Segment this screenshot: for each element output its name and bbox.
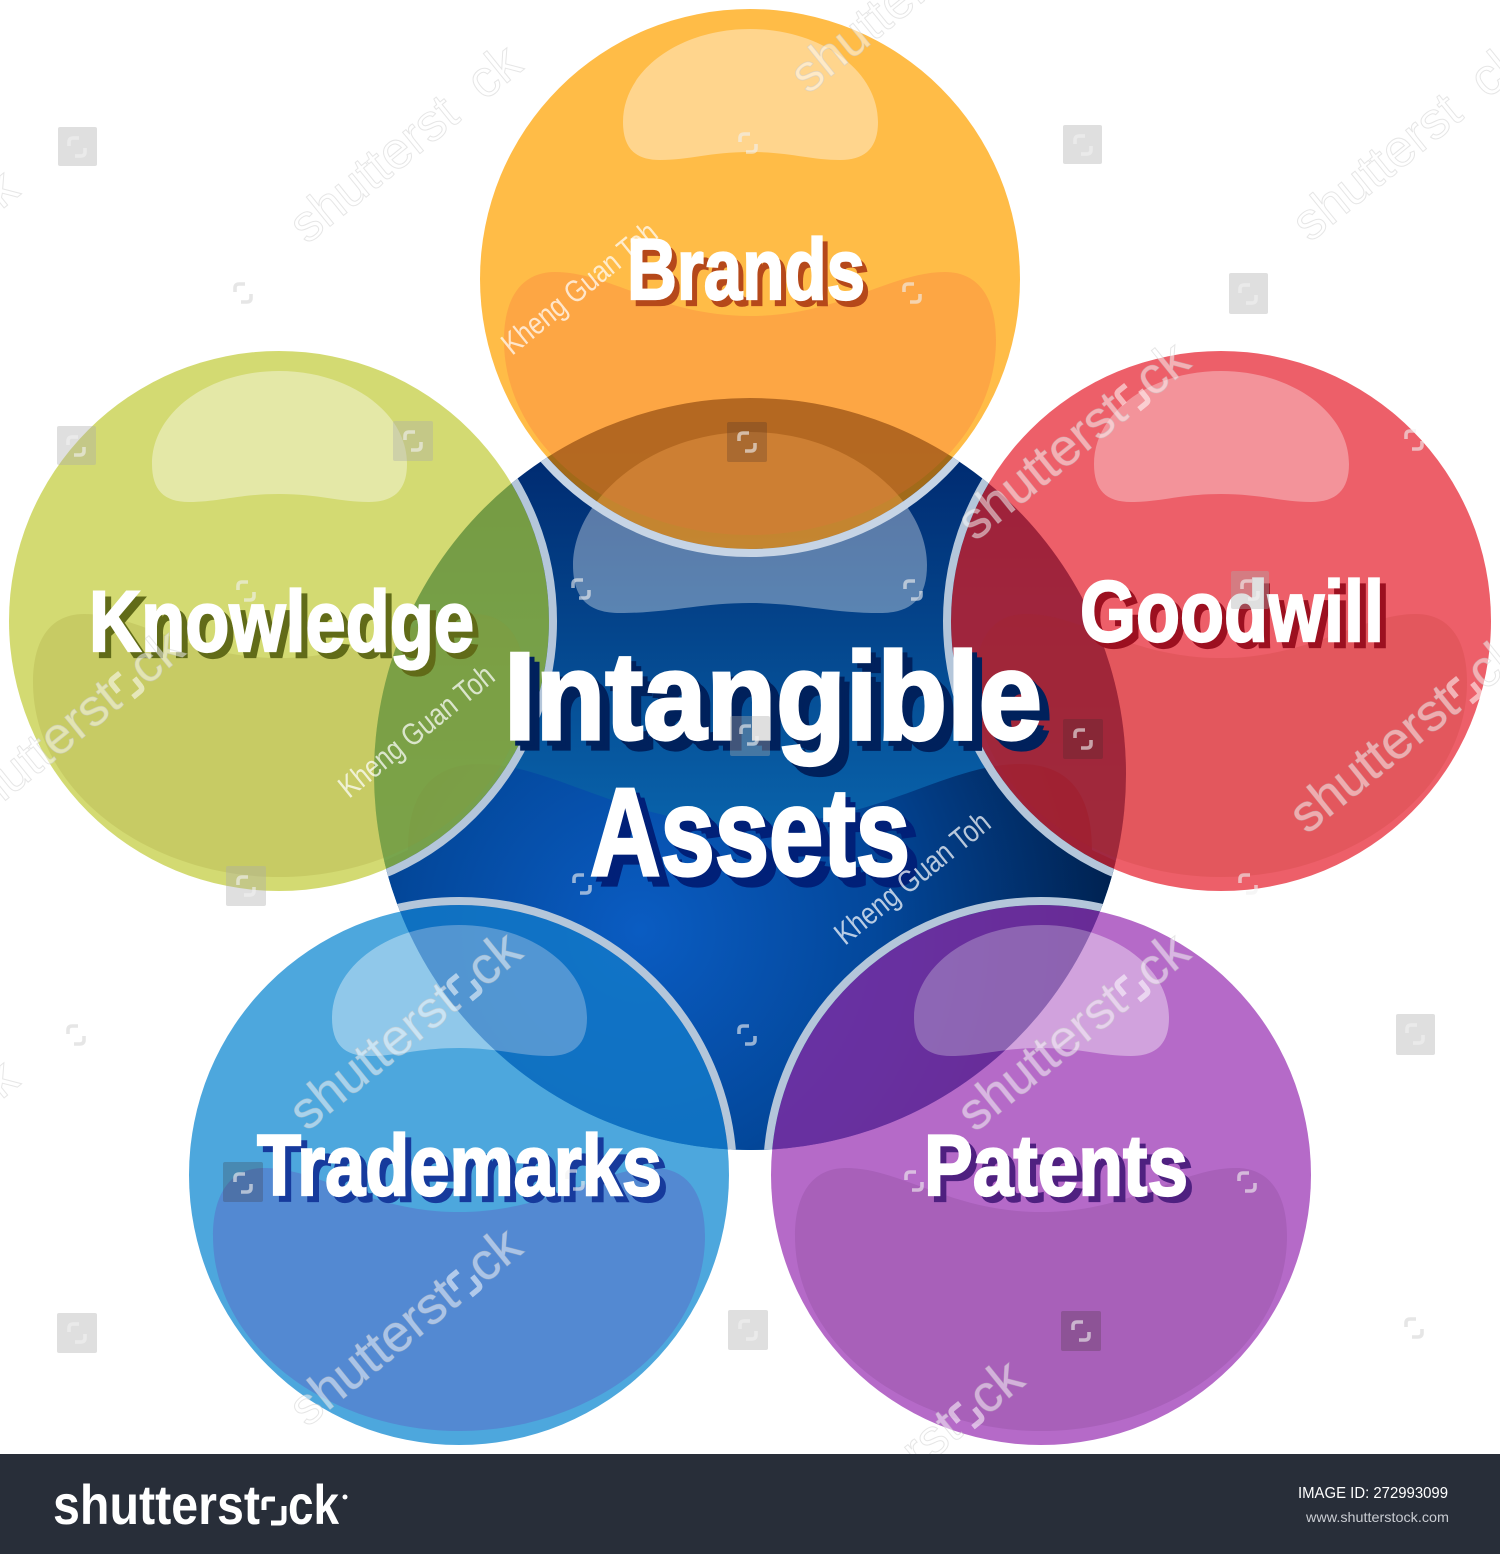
label: Brands: Brands — [632, 228, 870, 324]
label: Patents: Patents — [924, 1118, 1188, 1214]
label: Intangible Assets: Intangible — [509, 633, 1047, 771]
watermark: shutterstock wordmarks: shutterst — [278, 83, 470, 254]
watermark: author name: Kheng Guan Toh — [494, 215, 664, 361]
overlap shading between petals and center — [374, 398, 1126, 1150]
watermark: shutterstock wordmarks: shutterst — [1278, 673, 1470, 844]
watermark: shutterstock wordmarks: ck — [1123, 329, 1201, 408]
petal: Knowledge — [9, 351, 549, 891]
label: Patents: Patents — [930, 1124, 1194, 1220]
label: Intangible Assets: Assets — [590, 764, 910, 902]
watermark: author name — [331, 215, 997, 951]
website: www.shutterstock.com — [1305, 1509, 1449, 1525]
watermark: author name: Kheng Guan Toh — [827, 805, 997, 951]
label: Goodwill: Goodwill — [1080, 564, 1384, 660]
footer logo: shutterst — [53, 1473, 260, 1536]
label: Knowledge: Knowledge — [95, 580, 480, 676]
watermark: shutterstock wordmarks: shutterst — [946, 380, 1138, 551]
petal: Goodwill — [951, 351, 1491, 891]
label: Intangible Assets: Intangible — [504, 628, 1042, 766]
label: Trademarks: Trademarks — [263, 1124, 668, 1220]
watermark icons — [68, 134, 1423, 1342]
label: Intangible Assets: Intangible — [514, 638, 1052, 776]
watermark: shutterstock wordmarks: ck — [455, 1215, 533, 1294]
watermark: shutterstock wordmarks: ck — [117, 617, 195, 696]
footer bar — [0, 1454, 1500, 1554]
center circle: Intangible Assets — [374, 398, 1126, 1150]
label: Intangible Assets: Assets — [600, 774, 920, 912]
label: Intangible Assets — [504, 628, 1052, 912]
watermark: shutterstock wordmarks: ck — [455, 32, 533, 111]
petal: Trademarks — [189, 905, 729, 1445]
petal: Brands — [480, 9, 1020, 549]
watermark: shutterstock wordmarks: ck — [957, 1347, 1035, 1426]
watermark: shutterstock wordmarks: shutterst — [1281, 81, 1473, 252]
watermark: shutterstock wordmarks: shutterst — [278, 970, 470, 1141]
label: Intangible Assets: Assets — [595, 769, 915, 907]
image id: IMAGE ID: 272993099 — [1298, 1485, 1448, 1502]
highlight showing through the Brands overlap — [597, 432, 903, 549]
label: Goodwill: Goodwill — [1086, 570, 1390, 666]
label: Knowledge: Knowledge — [89, 574, 474, 670]
watermark: shutterstock wordmarks: shutterst — [946, 971, 1138, 1142]
watermark tiles — [57, 125, 1435, 1353]
petal rims over center circle — [386, 457, 1114, 1150]
watermark: shutterstock wordmarks: ck — [455, 919, 533, 998]
label: Trademarks: Trademarks — [257, 1118, 662, 1214]
watermark: shutterstock wordmarks: ck — [1123, 920, 1201, 999]
label: Brands: Brands — [627, 222, 865, 318]
petal: Patents — [771, 905, 1311, 1445]
footer logo: ck — [288, 1473, 340, 1536]
watermark: shutterstock wordmarks: shutterst — [278, 1266, 470, 1437]
watermark: author name: Kheng Guan Toh — [331, 658, 501, 804]
